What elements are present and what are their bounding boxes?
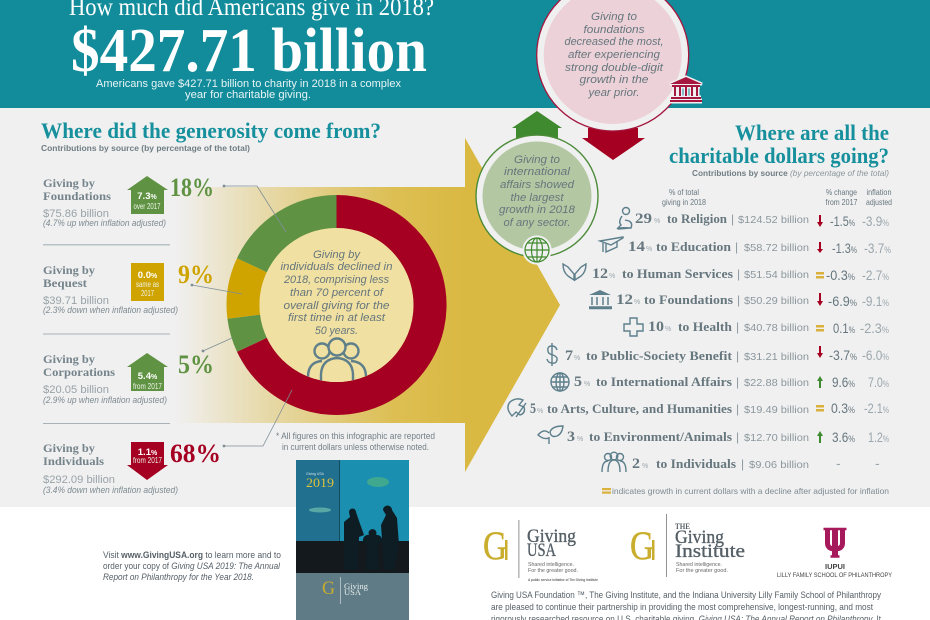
- table column headers: from 2017: [826, 197, 858, 207]
- row: environment/animals: $12.70 billion: [744, 432, 809, 444]
- row: environment/animals: |: [736, 430, 739, 444]
- big total figure: $427.71 billion: [71, 17, 427, 85]
- partnership paragraph: [491, 590, 881, 620]
- cover title small: Giving USA: [306, 471, 324, 476]
- callout: foundations: Giving to: [591, 11, 637, 23]
- row: public-society benefit: %: [574, 355, 580, 362]
- row: arts, culture, humanities: 5: [530, 401, 536, 417]
- row: religion: -1.5%: [830, 213, 855, 229]
- logo: giving usa: G: [483, 523, 507, 568]
- callout: international affairs: [476, 135, 598, 257]
- row: individuals: -: [875, 455, 880, 471]
- row: arts, culture, humanities: 0.3%: [831, 400, 855, 416]
- heading: where are all the charitable dollars going: charitable dollars going?: [669, 143, 889, 168]
- icon: green globe: [523, 236, 551, 264]
- row: human services: 12: [592, 266, 608, 282]
- row: education: %: [646, 246, 652, 253]
- row: public-society benefit: [547, 343, 889, 366]
- donut centre text: Giving by: [313, 249, 361, 261]
- row: public-society benefit: to Public-Society Benefit: [586, 349, 733, 363]
- logo: giving usa: Shared intelligence.: [528, 562, 574, 568]
- heading: where are all the charitable dollars going: Contributions by source (by percentage of the total): [692, 168, 889, 178]
- row: health: -2.3%: [860, 320, 889, 336]
- panel: giving by bequest: [43, 260, 214, 315]
- visit text: Report on Philanthropy for the Year 2018.: [103, 572, 254, 583]
- row: education: -1.3%: [832, 240, 857, 256]
- logo: the giving institute: Giving: [675, 527, 724, 548]
- row: environment/animals: [538, 426, 889, 445]
- icon: cross: [624, 318, 643, 336]
- donut centre text: [280, 249, 392, 337]
- row: religion: [617, 208, 889, 229]
- row: international affairs: %: [584, 381, 590, 388]
- row: human services: to Human Services: [622, 267, 733, 281]
- logo: giving usa: A public service initiative of The Giving Institute: [528, 578, 598, 582]
- row: individuals: to Individuals: [656, 457, 736, 471]
- row: international affairs: $22.88 billion: [744, 377, 809, 389]
- table column headers: % of total: [669, 187, 699, 197]
- row: environment/animals: %: [577, 436, 583, 443]
- donut centre text: than 70 percent of: [290, 287, 385, 299]
- panel: giving by individuals: from 2017: [133, 455, 162, 465]
- arrow: green up: [512, 111, 562, 140]
- icon: red bank: [670, 77, 702, 101]
- row: public-society benefit: $31.21 billion: [744, 351, 809, 363]
- table column headers: giving in 2018: [662, 197, 706, 207]
- row: individuals: -: [836, 455, 841, 471]
- cover year: 2019: [306, 475, 334, 490]
- row: education: -3.7%: [864, 240, 891, 256]
- row: health: 10: [648, 319, 664, 335]
- callout: foundations: year prior.: [587, 87, 640, 99]
- row: education: [600, 237, 891, 256]
- row: foundations: 12: [616, 292, 633, 308]
- row: individuals: |: [741, 457, 744, 471]
- row: individuals: 2: [632, 456, 640, 472]
- panel: giving by bequest: $39.71 billion: [43, 295, 109, 307]
- report cover: [296, 460, 409, 620]
- donut centre text: 2018, comprising less: [283, 274, 389, 286]
- panel: giving by corporations: 5%: [178, 350, 214, 379]
- report cover: USA: [344, 588, 361, 597]
- row: religion: to Religion: [667, 212, 727, 226]
- callout: foundations: after experiencing: [568, 49, 661, 61]
- row: human services: %: [609, 273, 615, 280]
- partnership paragraph: are pleased to continue their partnership in providing the most comprehensive, longest-running, and most: [491, 602, 873, 613]
- callout: international affairs: the largest: [510, 192, 564, 204]
- row: international affairs: 5: [574, 374, 582, 390]
- icon: bank: [589, 290, 612, 308]
- panel: giving by corporations: $20.05 billion: [43, 384, 109, 396]
- row: human services: -0.3%: [826, 267, 855, 283]
- row: religion: $124.52 billion: [738, 214, 809, 226]
- icon: praying figure: [617, 208, 632, 229]
- logo: the giving institute: [630, 514, 745, 577]
- row: education: |: [735, 240, 738, 254]
- row: international affairs: 7.0%: [868, 374, 889, 390]
- row: individuals: [602, 452, 880, 472]
- legend note: indicates growth in current dollars with a decline after adjusted for inflation: [612, 486, 889, 496]
- panel: giving by foundations: $75.86 billion: [43, 208, 109, 220]
- panel: giving by individuals: (3.4% down when inflation adjusted): [43, 485, 178, 495]
- row: arts, culture, humanities: $19.49 billion: [744, 404, 809, 416]
- row: foundations: to Foundations: [644, 293, 733, 307]
- row: religion: 29: [635, 211, 652, 227]
- panel: giving by individuals: $292.09 billion: [43, 474, 115, 486]
- row: health: |: [736, 320, 739, 334]
- table column headers: inflation: [866, 187, 892, 197]
- row: foundations: %: [634, 299, 640, 306]
- heading: where did the generosity come from: Contributions by source (by percentage of the total): [41, 143, 250, 153]
- icon: small people: [602, 452, 626, 472]
- segment: bequest 9%: [227, 258, 267, 319]
- icon: open hands: [563, 264, 586, 280]
- row: environment/animals: to Environment/Animals: [589, 430, 732, 444]
- panel: giving by foundations: [43, 173, 214, 228]
- icon: globe: [551, 373, 569, 391]
- heading: where did the generosity come from: Where did the generosity come from?: [41, 118, 381, 143]
- row: health: $40.78 billion: [744, 322, 809, 334]
- donut centre text: individuals declined in: [280, 261, 392, 273]
- row: health: 0.1%: [833, 320, 855, 336]
- panel: giving by bequest: 0.0%: [138, 270, 158, 281]
- row: human services: |: [737, 267, 740, 281]
- icon: palette: [508, 399, 526, 417]
- logo: iupui lilly family school: [777, 529, 892, 579]
- row: arts, culture, humanities: %: [537, 408, 543, 415]
- row: public-society benefit: |: [736, 349, 739, 363]
- row: human services: [563, 264, 889, 283]
- logo: the giving institute: For the greater good.: [676, 568, 728, 574]
- logo: giving usa: Giving: [527, 526, 576, 547]
- panel: giving by foundations: 18%: [170, 173, 214, 202]
- donut chart: [227, 195, 447, 415]
- panel: giving by individuals: 68%: [170, 439, 221, 468]
- panel: giving by foundations: 7.3%: [137, 191, 157, 202]
- row: environment/animals: 1.2%: [868, 429, 889, 445]
- panel: giving by individuals: 1.1%: [138, 447, 158, 458]
- donut centre disc: [260, 228, 414, 382]
- callout: international affairs: growth in 2018: [499, 204, 576, 216]
- logo: the giving institute: THE: [675, 522, 690, 531]
- callout: foundations: [537, 0, 689, 131]
- row: religion: -3.9%: [862, 213, 889, 229]
- icon: graduation cap: [600, 237, 623, 252]
- donut centre text: 50 years.: [315, 325, 358, 337]
- callout: international affairs: Giving to: [514, 154, 560, 166]
- row: foundations: -6.9%: [828, 293, 857, 309]
- panel: giving by bequest: Bequest: [43, 276, 87, 290]
- logo: giving usa: For the greater good.: [528, 568, 578, 574]
- logo: giving usa: [483, 520, 598, 582]
- row: education: to Education: [656, 240, 731, 254]
- row: environment/animals: 3: [567, 429, 575, 445]
- row: international affairs: to International Affairs: [596, 375, 732, 389]
- table column headers: % change: [826, 187, 857, 197]
- panel: giving by bequest: 2017: [141, 288, 154, 298]
- panel: giving by corporations: Corporations: [43, 365, 115, 379]
- header subtitle: year for charitable giving.: [185, 89, 311, 101]
- cover logo: G: [322, 578, 335, 599]
- callout: international affairs: affairs showed: [500, 179, 575, 191]
- row: foundations: $50.29 billion: [744, 295, 809, 307]
- row: religion: |: [731, 212, 734, 226]
- header subtitle: Americans gave $427.71 billion to charity in 2018 in a complex: [96, 78, 401, 90]
- logo: the giving institute: Institute: [675, 541, 745, 562]
- icon: leaves: [538, 426, 563, 444]
- table column headers: adjusted: [866, 197, 892, 207]
- panel: giving by bequest: 9%: [178, 260, 214, 289]
- icon: dollar sign: [547, 343, 557, 366]
- row: education: 14: [628, 239, 646, 255]
- row: arts, culture, humanities: |: [736, 402, 739, 416]
- segment: corporations 5%: [227, 315, 267, 352]
- header band: [0, 0, 930, 108]
- row: public-society benefit: 7: [565, 348, 574, 364]
- visit text: Visit www.GivingUSA.org to learn more and to: [103, 550, 281, 561]
- panel: giving by bequest: same as: [136, 279, 159, 289]
- row: arts, culture, humanities: -2.1%: [864, 400, 889, 416]
- visit text: [103, 550, 281, 583]
- logo: iupui lilly family school: IUPUI: [825, 562, 845, 571]
- segment: foundations 18%: [237, 195, 336, 272]
- header subtitle: [96, 78, 401, 101]
- icon: people: [308, 338, 366, 385]
- gold arrow background: [175, 138, 560, 472]
- row: foundations: |: [737, 293, 740, 307]
- callout: foundations: growth in the: [580, 74, 648, 86]
- arrow: red down: [582, 128, 645, 160]
- logo: iupui lilly family school: LILLY FAMILY SCHOOL OF PHILANTHROPY: [777, 573, 892, 579]
- heading: where did the generosity come from: [41, 118, 381, 153]
- row: foundations: [589, 290, 889, 309]
- row: human services: $51.54 billion: [744, 269, 809, 281]
- panel: giving by corporations: Giving by: [43, 352, 95, 366]
- callout: international affairs: international: [504, 166, 571, 178]
- row: health: [624, 318, 889, 336]
- callout: international affairs: of any sector.: [504, 217, 570, 229]
- panel: giving by foundations: Foundations: [43, 189, 111, 203]
- table column headers: [662, 187, 892, 207]
- row: arts, culture, humanities: [508, 399, 889, 417]
- panel: giving by foundations: over 2017: [134, 201, 161, 211]
- row: individuals: $9.06 billion: [749, 459, 809, 471]
- footnote: in current dollars unless otherwise noted.: [282, 442, 429, 452]
- row: environment/animals: 3.6%: [832, 429, 855, 445]
- panel: giving by bequest: Giving by: [43, 263, 95, 277]
- callout: foundations: decreased the most,: [564, 36, 664, 48]
- panel: giving by bequest: (2.3% down when inflation adjusted): [43, 305, 178, 315]
- row: international affairs: [551, 373, 889, 391]
- row: international affairs: |: [736, 375, 739, 389]
- panel: giving by corporations: (2.9% up when inflation adjusted): [43, 395, 167, 405]
- donut centre text: overall giving for the: [284, 300, 390, 312]
- panel: giving by foundations: Giving by: [43, 176, 95, 190]
- row: individuals: %: [642, 463, 648, 470]
- row: arts, culture, humanities: to Arts, Culture, and Humanities: [547, 402, 732, 416]
- logo: giving usa: USA: [527, 540, 556, 561]
- panel: giving by corporations: 5.4%: [138, 371, 158, 382]
- callout: foundations: foundations: [584, 24, 645, 36]
- panel: giving by corporations: [43, 350, 214, 405]
- row: health: %: [665, 326, 671, 333]
- footnote: [276, 431, 435, 452]
- row: international affairs: 9.6%: [832, 374, 855, 390]
- leader lines: [191, 185, 292, 447]
- row: health: to Health: [678, 320, 732, 334]
- donut centre text: first time in at least: [288, 312, 386, 324]
- segment: individuals 68%: [237, 195, 447, 415]
- panel: giving by foundations: (4.7% up when inflation adjusted): [43, 218, 166, 228]
- row: public-society benefit: -3.7%: [829, 347, 857, 363]
- panel: giving by individuals: Giving by: [43, 441, 95, 455]
- visit text: order your copy of Giving USA 2019: The Annual: [103, 561, 281, 572]
- row: education: $58.72 billion: [744, 242, 809, 254]
- row: human services: -2.7%: [862, 267, 889, 283]
- row: foundations: -9.1%: [862, 293, 889, 309]
- heading: where are all the charitable dollars going: [669, 120, 889, 178]
- row: public-society benefit: -6.0%: [862, 347, 889, 363]
- heading: where are all the charitable dollars going: Where are all the: [735, 120, 889, 145]
- cover logo wordmark: Giving: [344, 582, 368, 591]
- footnote: * All figures on this infographic are reported: [276, 431, 435, 441]
- callout: foundations: strong double-digit: [565, 62, 664, 74]
- logo: the giving institute: Shared intelligence.: [676, 562, 722, 568]
- row: religion: %: [654, 218, 660, 225]
- panel: giving by individuals: Individuals: [43, 454, 104, 468]
- logo: the giving institute: G: [630, 523, 654, 568]
- panel: giving by individuals: [43, 439, 221, 495]
- panel: giving by corporations: from 2017: [133, 381, 162, 391]
